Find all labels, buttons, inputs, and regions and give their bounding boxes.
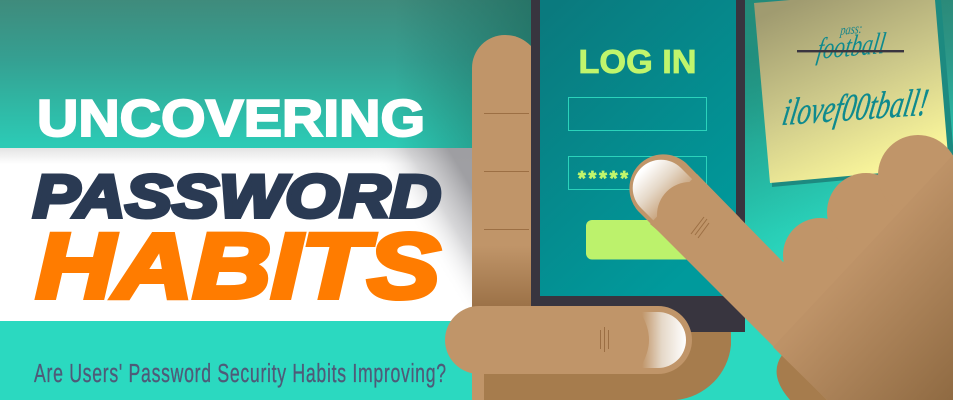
palm shadow (484, 332, 731, 400)
log in heading: LOG IN (578, 43, 696, 80)
white title band (0, 148, 472, 321)
finger crease lines (484, 114, 529, 230)
login button (586, 220, 706, 260)
thumb (445, 306, 692, 374)
knuckle: middle (827, 173, 905, 251)
subtitle: Are Users' Password Security Habits Improving? (34, 359, 446, 388)
palm underside (777, 355, 830, 400)
hand and finger (629, 147, 953, 400)
heading: habits: HABITS (36, 216, 440, 318)
left hand (445, 35, 731, 400)
username field (568, 98, 706, 130)
raised finger (472, 35, 531, 316)
note shadow (770, 0, 953, 187)
heading: uncovering: UNCOVERING (37, 90, 425, 148)
note crossed-out password: football (815, 26, 888, 66)
phone (531, 0, 745, 332)
pointing hand (629, 135, 953, 400)
hand shading (773, 155, 953, 400)
password field (568, 156, 706, 190)
heading: password: PASSWORD (33, 163, 441, 230)
wrist strip (472, 360, 484, 400)
note paper (754, 0, 949, 183)
phone body (531, 0, 745, 332)
cuticle (657, 182, 723, 248)
finger base cover (650, 174, 740, 300)
phone screen (540, 0, 736, 296)
note strike line (797, 50, 904, 52)
finger crease lines (691, 217, 709, 238)
knuckle: ring (878, 135, 953, 215)
finger nail (633, 160, 693, 222)
password asterisks: ***** (578, 168, 628, 190)
thumb crease lines (600, 327, 608, 352)
knuckle: index (783, 218, 857, 292)
sticky note (754, 0, 953, 187)
title (33, 90, 441, 318)
thumb nail (640, 312, 686, 368)
note label: pass: pass: (839, 21, 863, 39)
